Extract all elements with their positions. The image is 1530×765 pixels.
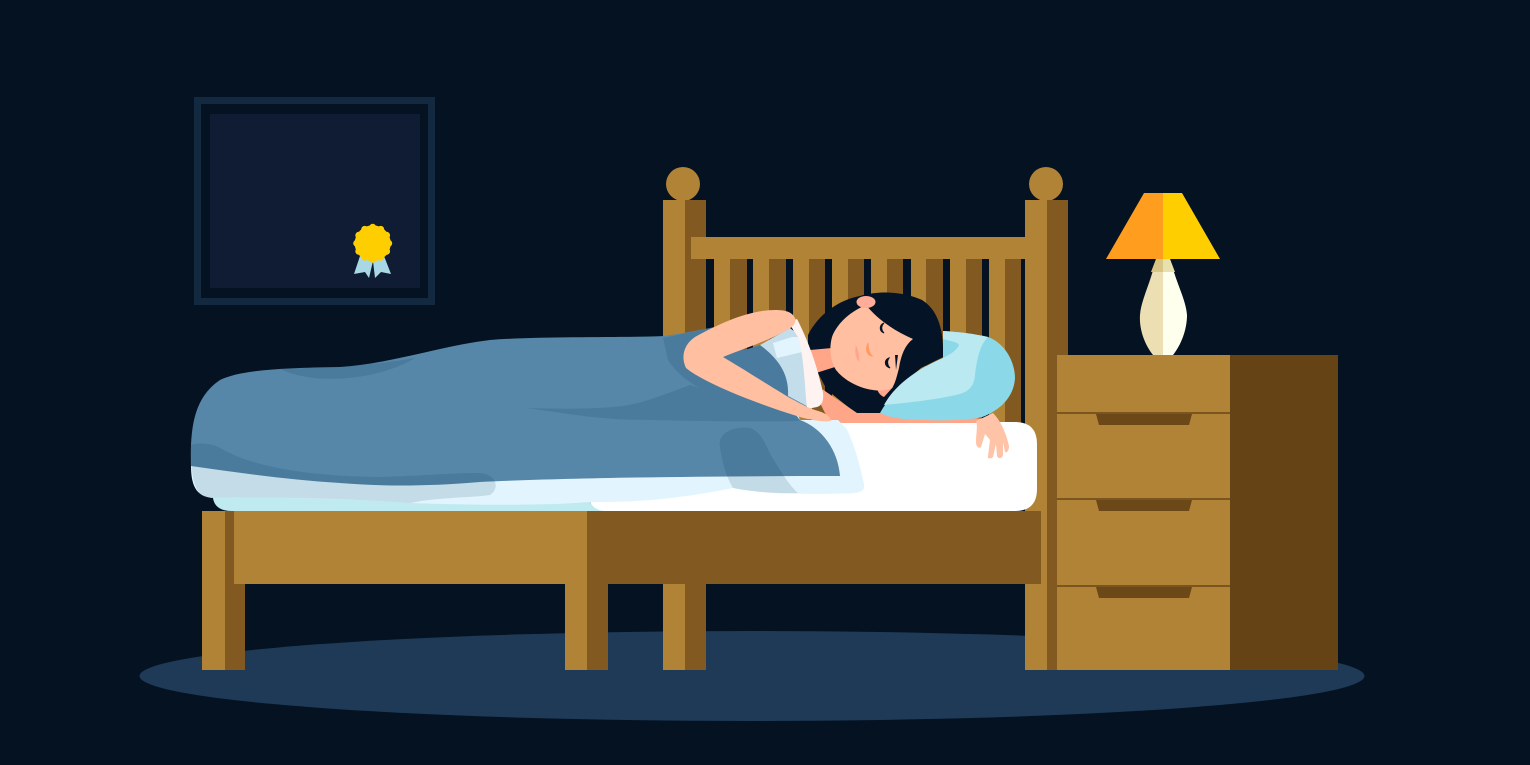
lamp base <box>1140 259 1187 355</box>
arm <box>683 310 831 421</box>
icon: award ribbon <box>353 224 392 278</box>
ear <box>856 296 876 308</box>
person: face <box>830 296 913 391</box>
chest sheet under arm <box>723 328 812 409</box>
blanket light lining <box>191 345 864 505</box>
rug <box>140 631 1364 721</box>
eyelash <box>895 355 898 370</box>
eye upper <box>880 323 884 333</box>
sleeve <box>788 319 823 409</box>
drawer dividers and handles <box>1057 412 1230 598</box>
blanket folds <box>191 325 800 503</box>
slats <box>714 259 1021 434</box>
pillow <box>880 331 1015 420</box>
headboard <box>663 167 1068 670</box>
hand over mattress <box>976 413 1009 458</box>
bed frame <box>202 511 1041 670</box>
lamp shade <box>1106 193 1220 259</box>
hair <box>808 293 943 414</box>
fitted sheet <box>213 490 604 511</box>
mouth <box>856 346 859 361</box>
lamp <box>1106 193 1220 355</box>
left post <box>663 167 706 670</box>
top rail <box>691 237 1025 259</box>
face shape <box>830 305 913 391</box>
nose <box>867 343 872 356</box>
nightstand <box>1057 355 1338 670</box>
right post <box>1025 167 1068 670</box>
torso and lower arm <box>821 389 990 423</box>
picture frame <box>194 97 435 305</box>
blanket <box>191 325 864 505</box>
mattress <box>590 422 1037 511</box>
person: back of hair and body <box>808 293 990 423</box>
blanket main <box>191 325 840 486</box>
eye lower <box>885 358 890 368</box>
lower ear <box>877 387 893 397</box>
person: arm <box>683 310 831 421</box>
neck <box>810 348 835 373</box>
